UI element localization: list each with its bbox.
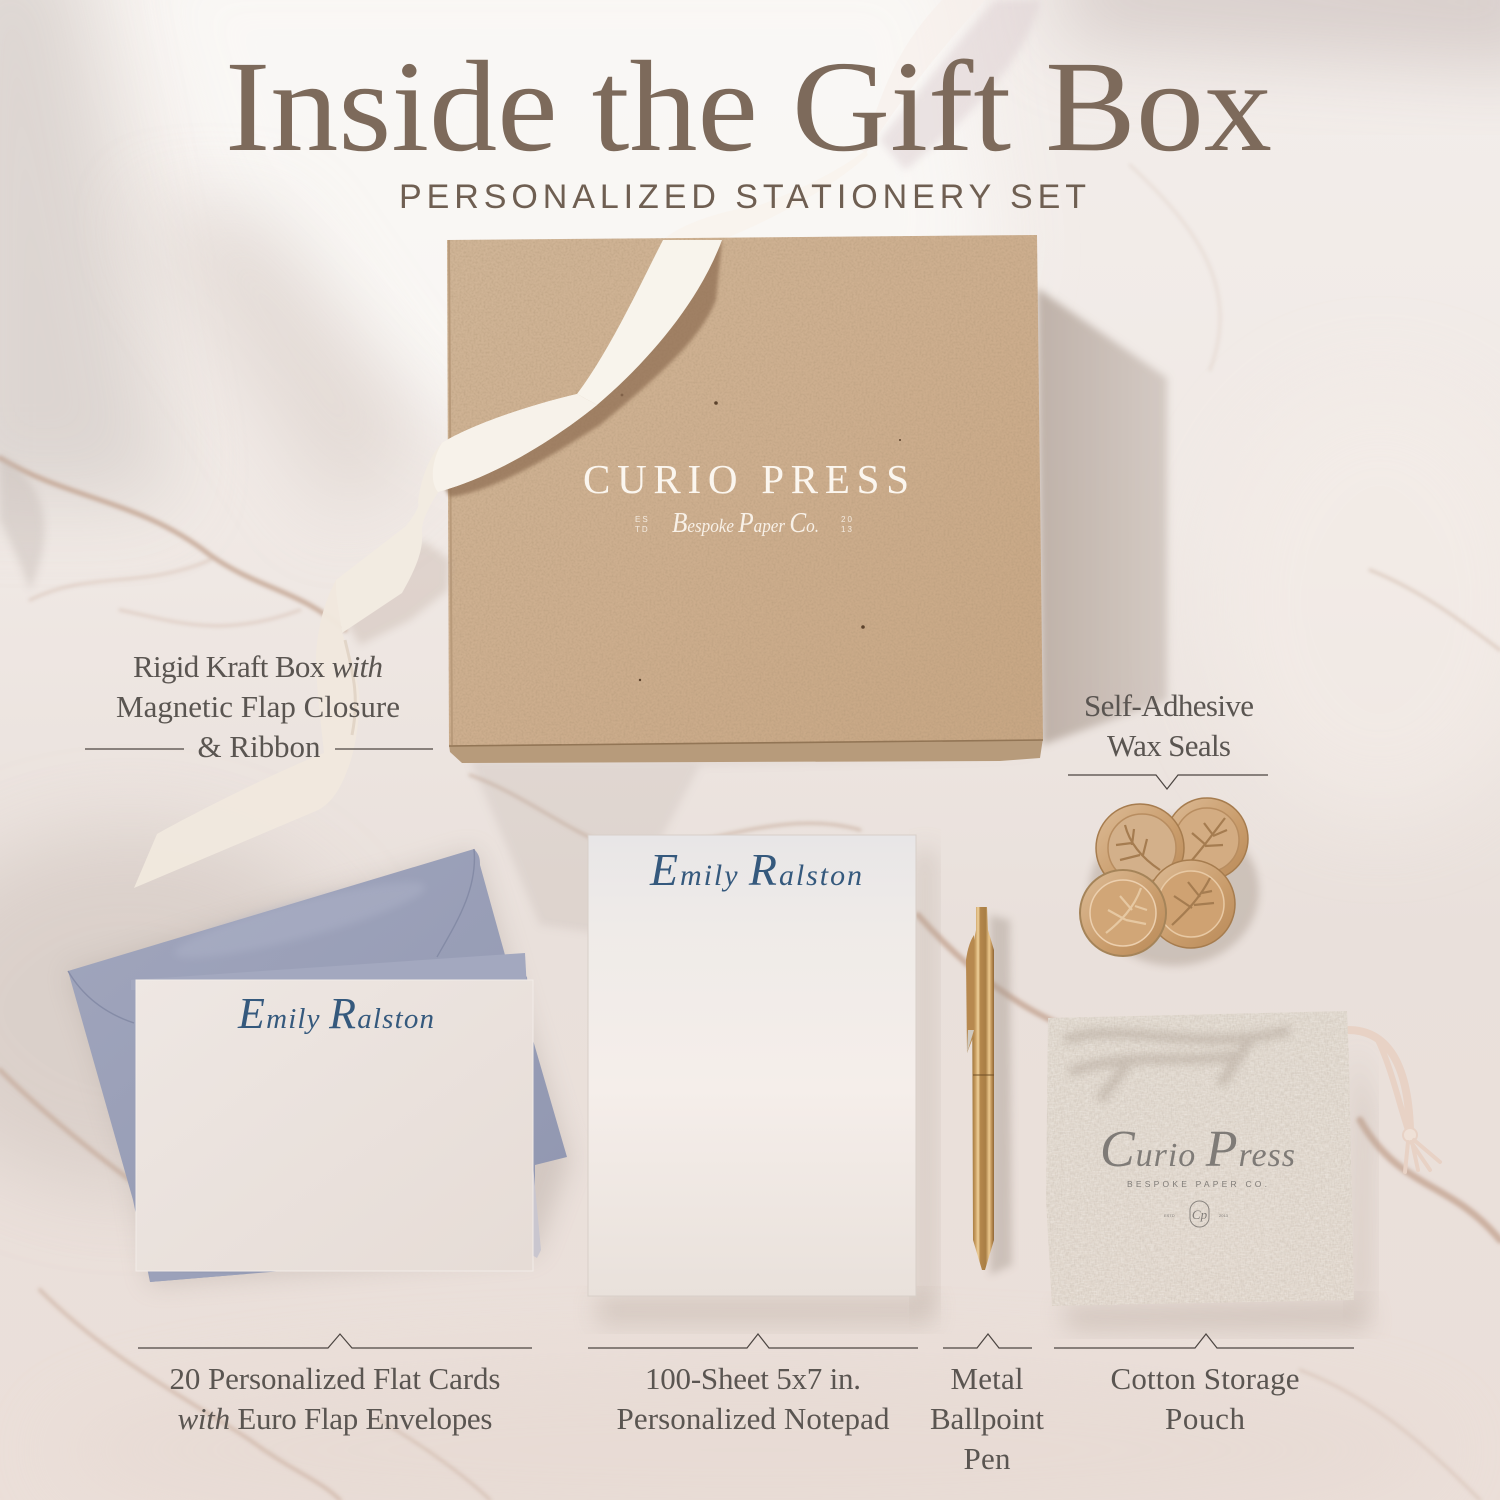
cotton pouch bbox=[1046, 1011, 1440, 1330]
label: kraft box bbox=[85, 649, 433, 764]
pouch logo: ESTD bbox=[1164, 1213, 1175, 1218]
ribbon upper tail behind title bbox=[663, 0, 1040, 240]
label: pouch: Cotton Storage bbox=[1110, 1361, 1300, 1396]
box logo: 13 bbox=[841, 525, 854, 534]
label: flat cards: with Euro Flap Envelopes bbox=[178, 1401, 492, 1436]
seal top left bbox=[1096, 804, 1184, 892]
label: wax seals bbox=[1068, 688, 1268, 789]
notepad bbox=[588, 835, 935, 1325]
box shadow bbox=[470, 288, 1167, 935]
seal top right bbox=[1166, 798, 1248, 880]
ribbon bbox=[134, 240, 722, 888]
envelopes bbox=[68, 849, 570, 1285]
box logo: ES bbox=[635, 515, 650, 524]
label: notepad: 100-Sheet 5x7 in. bbox=[645, 1361, 861, 1396]
box logo bbox=[583, 456, 909, 539]
label: flat cards: 20 Personalized Flat Cards bbox=[170, 1361, 500, 1396]
wax seals bbox=[1080, 798, 1259, 966]
box logo: CURIO PRESS bbox=[583, 456, 909, 502]
pouch logo: 2013 bbox=[1219, 1213, 1229, 1218]
label: pouch: Pouch bbox=[1165, 1401, 1246, 1436]
label: pen: Pen bbox=[964, 1441, 1011, 1476]
pouch logo bbox=[1100, 1121, 1295, 1227]
label: pouch bbox=[1054, 1334, 1354, 1436]
label: pen bbox=[930, 1334, 1044, 1476]
label: notepad bbox=[588, 1334, 918, 1436]
pen bbox=[966, 907, 1012, 1275]
seal bottom left bbox=[1080, 870, 1166, 956]
label: kraft box: & Ribbon bbox=[198, 729, 321, 764]
box logo: Bespoke Paper Co. bbox=[672, 508, 819, 539]
label: wax seals: Wax Seals bbox=[1107, 728, 1231, 763]
seal bottom right bbox=[1147, 860, 1235, 948]
pouch logo: Cp bbox=[1192, 1207, 1208, 1222]
box logo: TD bbox=[635, 525, 650, 534]
label: kraft box: Rigid Kraft Box with bbox=[133, 649, 383, 684]
label: kraft box: Magnetic Flap Closure bbox=[116, 689, 400, 724]
label: notepad: Personalized Notepad bbox=[616, 1401, 890, 1436]
subtitle: PERSONALIZED STATIONERY SET bbox=[399, 178, 1086, 216]
label: wax seals: Self-Adhesive bbox=[1084, 688, 1254, 723]
kraft gift box bbox=[447, 235, 1043, 763]
box logo: 20 bbox=[841, 515, 854, 524]
label: flat cards bbox=[138, 1334, 532, 1436]
label: pen: Metal bbox=[950, 1361, 1024, 1396]
flat card: Emily Ralston bbox=[237, 989, 434, 1038]
label: pen: Ballpoint bbox=[930, 1401, 1044, 1436]
pouch logo: BESPOKE PAPER CO. bbox=[1127, 1179, 1267, 1189]
flat card bbox=[136, 980, 533, 1271]
pouch drawstring bbox=[1348, 1030, 1440, 1172]
notepad: Emily Ralston bbox=[649, 844, 862, 895]
pouch logo: Curio Press bbox=[1100, 1121, 1295, 1178]
title: Inside the Gift Box bbox=[225, 35, 1272, 179]
